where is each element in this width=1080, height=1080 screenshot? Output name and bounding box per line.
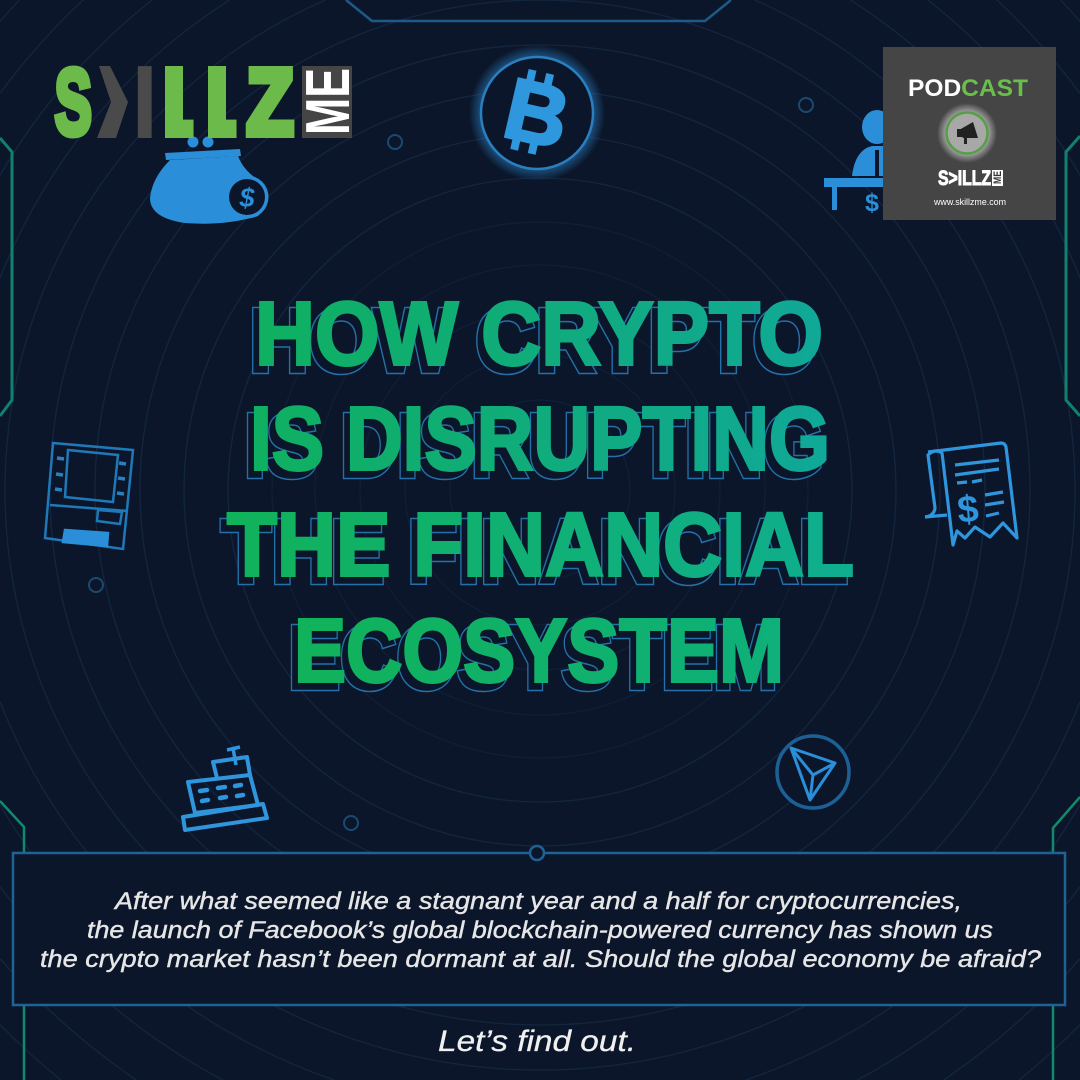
- podcast heading: PODCAST: [908, 75, 1028, 102]
- title shadow outlines: ECOSYSTEM: [288, 608, 778, 708]
- logo letters LLZ: Z: [247, 50, 293, 154]
- icon: person at desk: [824, 110, 892, 217]
- logo letters LLZ: [166, 50, 293, 154]
- skillz me logo: [55, 50, 363, 154]
- icon: tron coin: [777, 736, 849, 808]
- intro panel: [13, 846, 1065, 1005]
- logo letters LLZ: L: [209, 50, 236, 154]
- title shadow outlines: THE FINANCIAL: [221, 502, 848, 602]
- icon: bitcoin: B: [496, 60, 578, 168]
- logo bar letter I: I: [136, 50, 153, 154]
- title shadow outlines: IS DISRUPTING: [244, 396, 824, 496]
- panel node: [530, 846, 544, 860]
- website url: www.skillzme.com: [933, 197, 1006, 207]
- icon: coin purse: $: [238, 183, 255, 213]
- podcast card: [883, 47, 1056, 220]
- logo letters LLZ: L: [166, 50, 193, 154]
- title line 1: HOW CRYPTO: [255, 284, 823, 384]
- title line 2: IS DISRUPTING: [250, 390, 830, 490]
- right lower green frame: [1053, 797, 1080, 1080]
- icon: person at desk: $: [865, 189, 879, 217]
- title line 4: ECOSYSTEM: [294, 602, 784, 702]
- title shadow outlines: IS DISRUPTING: [244, 396, 824, 496]
- icon: coin purse: [150, 136, 268, 224]
- intro text: After what seemed like a stagnant year and a half for cryptocurrencies,: [113, 888, 962, 915]
- icon: atm: [45, 443, 133, 549]
- title shadow outlines: THE FINANCIAL: [221, 502, 848, 602]
- right upper green frame: [1066, 136, 1080, 416]
- intro text: [40, 888, 1042, 973]
- logo letter S: S: [55, 50, 92, 154]
- icon: receipt: [925, 443, 1017, 545]
- icon: megaphone: [937, 103, 997, 163]
- small skillz logo: S>ILLZ: [938, 167, 991, 190]
- logo chevron: [97, 66, 128, 138]
- small skillz logo: ME: [992, 171, 1004, 184]
- closing line: Let’s find out.: [438, 1025, 636, 1058]
- icon: bitcoin: [469, 45, 605, 181]
- icon: receipt: $: [956, 488, 980, 532]
- title shadow outlines: ECOSYSTEM: [288, 608, 778, 708]
- title shadow outlines: [221, 292, 848, 708]
- icon: cash register: [183, 747, 267, 830]
- intro text: the launch of Facebook’s global blockchain-powered currency has shown us: [87, 917, 993, 944]
- intro text: the crypto market hasn’t been dormant at all. Should the global economy be afraid?: [40, 946, 1042, 973]
- logo ME badge: ME: [294, 68, 363, 135]
- title: [221, 284, 854, 708]
- title shadow outlines: HOW CRYPTO: [249, 292, 817, 392]
- title shadow outlines: HOW CRYPTO: [249, 292, 817, 392]
- left upper green frame: [0, 138, 12, 416]
- small ring nodes: [89, 98, 813, 830]
- top frame line: [346, 0, 731, 21]
- left lower green frame: [0, 801, 24, 1080]
- title line 3: THE FINANCIAL: [227, 496, 854, 596]
